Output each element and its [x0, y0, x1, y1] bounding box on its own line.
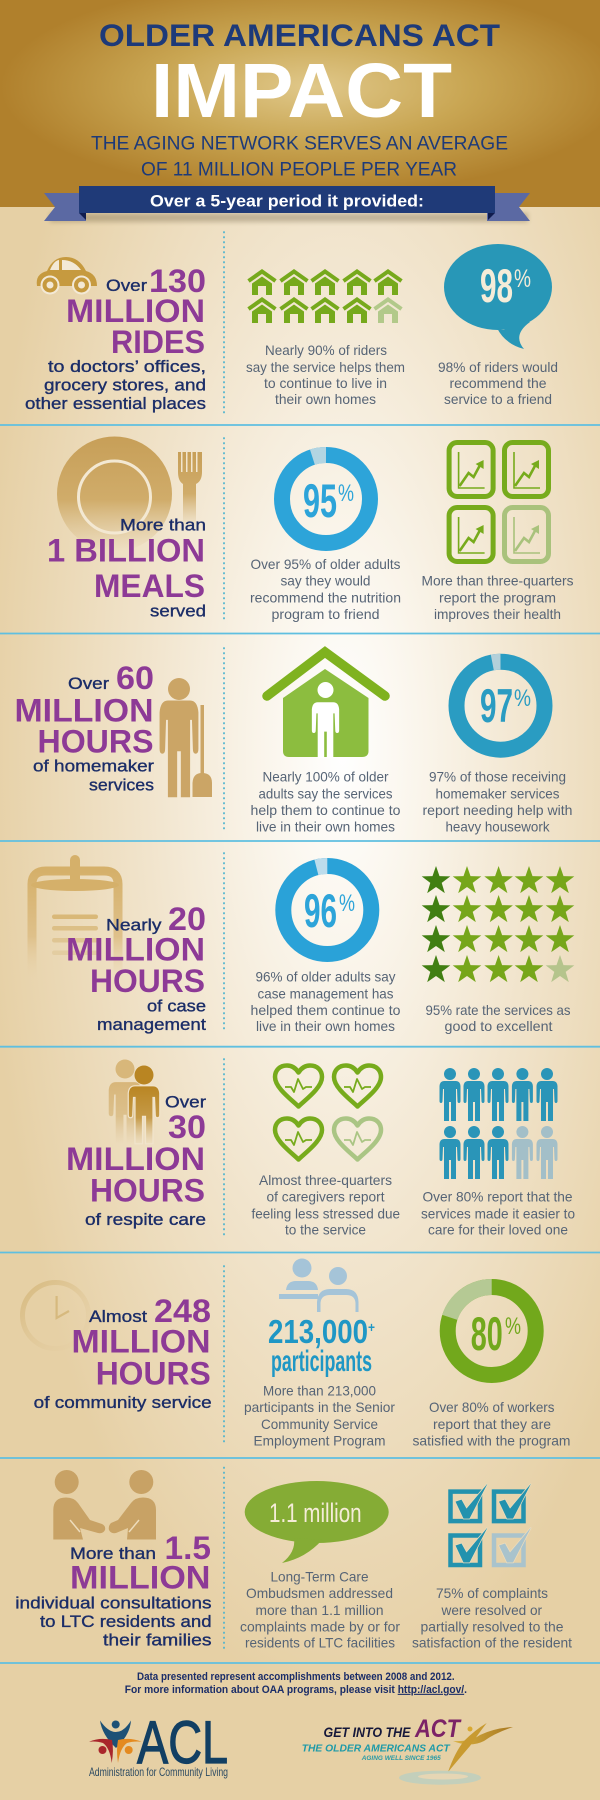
panel: consultations [15, 1470, 572, 1650]
panel: homemaker [14, 652, 572, 835]
headline: over 130 million rides: RIDES [111, 324, 205, 360]
donut: 96% [283, 866, 371, 954]
caption: stress: feeling less stressed due [252, 1205, 400, 1221]
caption: employment: More than 213,000 [263, 1383, 376, 1399]
caption: satisfied: satisfied with the program [412, 1432, 570, 1448]
subtitle line two: OF 11 MILLION PEOPLE PER YEAR [141, 160, 457, 181]
headline: over 130 million rides: 130 [149, 263, 206, 299]
caption: housework: heavy housework [446, 819, 550, 835]
caption: housework: report needing help with [422, 802, 572, 818]
caption: own homes: help them to continue to [250, 802, 401, 818]
caption: employment: Community Service [261, 1416, 378, 1432]
caption: satisfied: report that they are [433, 1416, 551, 1432]
caption: riders homes [246, 342, 405, 407]
headline: 248 million hours [34, 1293, 212, 1412]
headline: 1 billion meals [47, 516, 206, 621]
donut: 80%: 80 [471, 1307, 503, 1360]
donut: 95%: % [338, 480, 354, 507]
donut: 96%: 96 [304, 884, 337, 937]
caption: riders homes: to continue to live in [264, 375, 387, 391]
caption: satisfied [412, 1399, 570, 1448]
donut: 95% [282, 455, 370, 543]
headline: 60 million hours: HOURS [38, 724, 154, 760]
logo: get into the act: GET INTO THE [324, 1725, 411, 1740]
icon: charts [449, 442, 548, 562]
caption: stress: Almost three-quarters [259, 1172, 392, 1188]
footer note [125, 1671, 467, 1696]
footer note: For more information about OAA programs, please visit http://acl.gov/. [125, 1684, 467, 1696]
headline: 60 million hours: Over [68, 674, 109, 693]
headline: 248 million hours: HOURS [96, 1355, 211, 1391]
caption: case management: 96% of older adults say [256, 969, 396, 985]
headline: 30 million hours [66, 1093, 206, 1229]
caption: housework [422, 769, 572, 835]
logo: ACL: ACL [137, 1709, 228, 1776]
headline: 60 million hours: 60 [116, 660, 154, 696]
caption: health: improves their health [434, 606, 561, 622]
headline: over 130 million rides: to doctors’ offices, [48, 357, 206, 376]
caption: caregivers: Over 80% report that the [422, 1189, 573, 1205]
panel: header [0, 0, 600, 222]
headline: 30 million hours: 30 [168, 1109, 206, 1145]
footer note: Data presented represent accomplishments between 2008 and 2012. [137, 1671, 455, 1683]
caption: housework: 97% of those receiving [429, 769, 566, 785]
headline: over 130 million rides [25, 263, 206, 413]
caption: nutrition [250, 556, 401, 622]
caption: ombudsmen: more than 1.1 million [256, 1602, 384, 1618]
caption: riders homes: Nearly 90% of riders [265, 342, 387, 358]
caption: riders homes: their own homes [275, 391, 376, 407]
speech bubble: 98%: 98 [480, 259, 513, 312]
headline: 60 million hours [14, 660, 154, 795]
panel: footer [89, 1671, 513, 1785]
icon: handshake [53, 1470, 156, 1540]
speech bubble: 1.1 million: 1.1 million [269, 1498, 362, 1528]
caption: complaints: partially resolved to the [420, 1618, 564, 1634]
caption: recommend: service to a friend [444, 391, 552, 407]
icon: plate [57, 436, 172, 552]
subtitle line one: THE AGING NETWORK SERVES AN AVERAGE [91, 134, 508, 154]
headline: 248 million hours: MILLION [72, 1324, 210, 1360]
logo: ACL: Administration for Community Living [89, 1765, 228, 1779]
caption: nutrition: Over 95% of older adults [250, 556, 400, 572]
panel: rides [25, 244, 558, 413]
stat: 213,000+: 213,000 [268, 1313, 368, 1350]
panel: community service [22, 1258, 570, 1448]
icon: participants [279, 1258, 358, 1312]
caption: caregivers: care for their loved one [428, 1221, 568, 1237]
stat: 213,000+: + [368, 1319, 375, 1335]
title: older americans act: OLDER AMERICANS ACT [99, 17, 500, 53]
headline: 20 million hours: 20 [168, 901, 206, 937]
logo: get into the act: AGING WELL SINCE 1965 [361, 1755, 441, 1762]
caption: complaints: 75% of complaints [436, 1585, 548, 1601]
headline: 248 million hours: Almost [89, 1307, 147, 1326]
icon: hearts [275, 1066, 381, 1160]
caption: recommend [438, 359, 558, 407]
caption: case management: helped them continue to [250, 1002, 401, 1018]
caption: caregivers: services made it easier to [421, 1205, 575, 1221]
donut: 80% [448, 1287, 536, 1375]
caption: employment [244, 1383, 395, 1448]
headline: 1.5 million [15, 1530, 212, 1649]
headline: over 130 million rides: Over [106, 276, 147, 295]
caption: nutrition: program to friend [272, 606, 380, 622]
headline: 20 million hours [66, 901, 206, 1034]
headline: 60 million hours: MILLION [14, 693, 154, 729]
headline: 248 million hours: of community service [34, 1393, 212, 1412]
speech bubble: 98% [444, 244, 552, 349]
caption: ombudsmen: Ombudsmen addressed [246, 1585, 393, 1601]
headline: 30 million hours: Over [165, 1093, 206, 1112]
caption: ombudsmen: complaints made by or for [240, 1618, 400, 1634]
headline: 60 million hours: of homemaker [33, 757, 154, 776]
headline: 30 million hours: HOURS [90, 1173, 205, 1209]
headline: 30 million hours: of respite care [85, 1210, 206, 1229]
caption: ombudsmen [240, 1569, 400, 1650]
headline: 1.5 million: to LTC residents and [40, 1612, 212, 1631]
icon: people [440, 1068, 558, 1179]
caption: excellent: 95% rate the services as [426, 1002, 570, 1018]
logo: get into the act [302, 1715, 513, 1785]
headline: 20 million hours: Nearly [106, 916, 162, 935]
speech bubble: 1.1 million [245, 1481, 389, 1563]
caption: recommend: recommend the [450, 375, 547, 391]
ribbon banner: Over a 5-year period it provided: [150, 192, 424, 210]
icon: stars [422, 866, 574, 982]
header gold band [0, 0, 600, 207]
caption: complaints: satisfaction of the resident [412, 1634, 572, 1650]
headline: over 130 million rides: other essential places [25, 394, 206, 413]
donut: 96%: % [339, 890, 355, 917]
caption: health: More than three-quarters [422, 573, 574, 589]
headline: 60 million hours: services [89, 776, 154, 795]
caption: excellent: good to excellent [444, 1018, 553, 1034]
panel: case management [31, 855, 574, 1034]
caption: stress [252, 1172, 400, 1237]
headline: 1 billion meals: More than [120, 516, 206, 535]
headline: 1 billion meals: served [150, 602, 206, 621]
icon: car [37, 257, 97, 294]
caption: nutrition: say they would [280, 573, 370, 589]
donut: 97% [456, 662, 544, 750]
icon: clock [22, 1282, 88, 1348]
caption: stress: to the service [285, 1221, 366, 1237]
caption: ombudsmen: residents of LTC facilities [245, 1634, 395, 1650]
icon: fork [178, 452, 202, 528]
caption: excellent [426, 1002, 570, 1034]
headline: 20 million hours: HOURS [90, 963, 205, 999]
donut: 95%: 95 [303, 474, 337, 527]
caption: complaints [412, 1585, 572, 1650]
caption: satisfied: Over 80% of workers [429, 1399, 554, 1415]
caption: health [422, 573, 574, 622]
headline: 20 million hours: of case [147, 997, 206, 1016]
logo: get into the act: ACT [414, 1715, 462, 1743]
icon: clipboard [31, 855, 119, 980]
headline: 1 billion meals: 1 BILLION [47, 533, 205, 569]
caption: own homes [250, 769, 401, 835]
headline: 1.5 million: More than [70, 1544, 156, 1563]
caption: case management: live in their own homes [256, 1018, 395, 1034]
headline: 1.5 million: their families [103, 1630, 212, 1649]
icon: caregiver pair [109, 1060, 160, 1144]
donut: 97%: 97 [480, 679, 513, 732]
headline: over 130 million rides: grocery stores, and [44, 376, 206, 395]
caption: own homes: live in their own homes [256, 819, 395, 835]
headline: 20 million hours: management [97, 1015, 206, 1034]
headline: 20 million hours: MILLION [66, 932, 205, 968]
donut: 80%: % [505, 1313, 521, 1340]
caption: health: report the program [439, 589, 556, 605]
icon: houses [248, 272, 402, 323]
caption: ombudsmen: Long-Term Care [270, 1569, 369, 1585]
caption: riders homes: say the service helps them [246, 359, 405, 375]
donut: 97%: % [514, 685, 531, 712]
caption: employment: Employment Program [254, 1432, 386, 1448]
headline: 1.5 million: MILLION [70, 1560, 210, 1596]
icon: checkboxes [450, 1484, 531, 1565]
ribbon banner [44, 186, 530, 222]
logo: ACL [89, 1709, 228, 1779]
stat: participants: participants [271, 1345, 372, 1378]
caption: own homes: adults say the services [258, 785, 392, 801]
headline: 1 billion meals: MEALS [94, 568, 205, 604]
caption: case management [250, 969, 401, 1034]
caption: employment: participants in the Senior [244, 1399, 395, 1415]
caption: complaints: were resolved or [441, 1602, 542, 1618]
panel: respite care [66, 1060, 575, 1237]
headline: 30 million hours: MILLION [66, 1141, 205, 1177]
headline: 1.5 million: 1.5 [164, 1530, 211, 1566]
logo: get into the act: THE OLDER AMERICANS ACT [302, 1743, 451, 1755]
caption: own homes: Nearly 100% of older [262, 769, 389, 785]
headline: 248 million hours: 248 [154, 1293, 211, 1329]
panel: meals [47, 436, 574, 622]
title: impact: IMPACT [151, 48, 452, 134]
caption: nutrition: recommend the nutrition [250, 589, 401, 605]
speech bubble: 98%: % [514, 265, 531, 293]
caption: caregivers [421, 1189, 575, 1237]
caption: recommend: 98% of riders would [438, 359, 558, 375]
icon: person with broom [160, 678, 212, 797]
caption: stress: of caregivers report [266, 1189, 385, 1205]
headline: 1.5 million: individual consultations [15, 1594, 212, 1613]
icon: house with person [267, 652, 385, 758]
caption: case management: case management has [258, 985, 394, 1001]
headline: over 130 million rides: MILLION [66, 293, 205, 329]
caption: housework: homemaker services [436, 785, 560, 801]
